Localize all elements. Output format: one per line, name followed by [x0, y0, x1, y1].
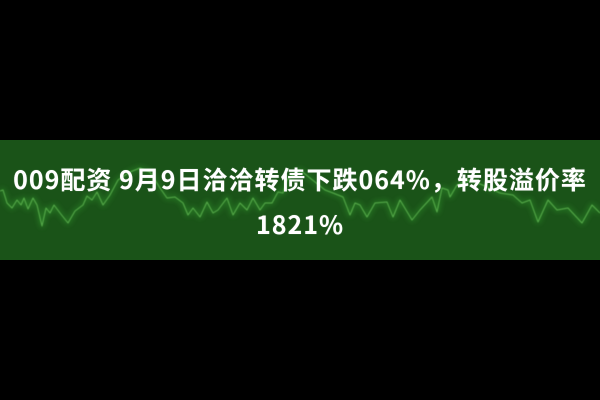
title: 009配资 9月9日洽洽转债下跌064%，转股溢价率 [13, 161, 587, 197]
chart: glowing green line [0, 165, 600, 228]
panel: green banner [0, 140, 600, 260]
title [13, 161, 587, 242]
title: 1821% [256, 206, 344, 242]
